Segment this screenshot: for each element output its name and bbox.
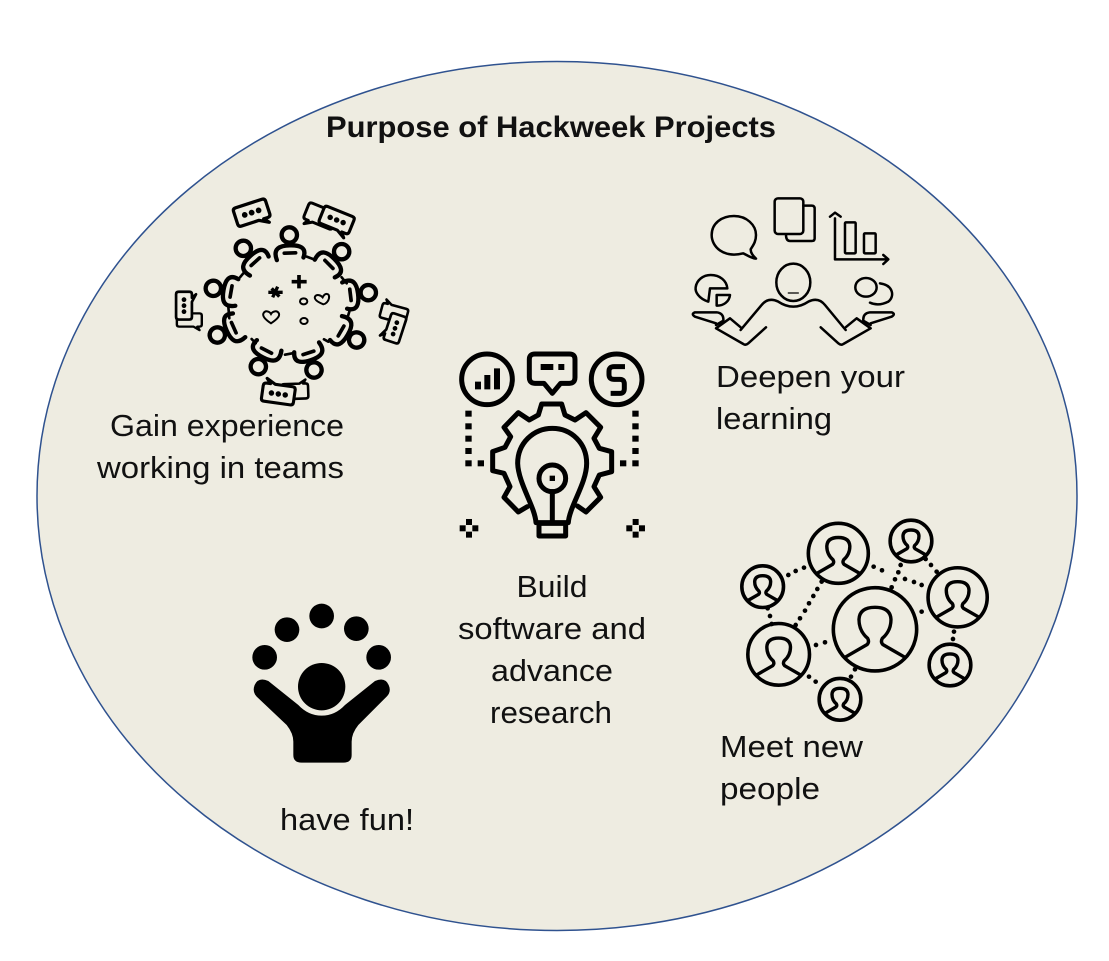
icon: person juggling balls bbox=[252, 604, 391, 763]
label: meet new people: Meet new bbox=[720, 729, 864, 764]
label: deepen learning: Deepen your bbox=[716, 359, 905, 394]
label: meet new people bbox=[720, 729, 864, 806]
icon: person juggling ideas bbox=[693, 198, 894, 345]
label: build software: Build bbox=[516, 569, 588, 604]
label: build software: research bbox=[490, 695, 612, 730]
label: deepen learning: learning bbox=[716, 401, 832, 436]
label: build software: advance bbox=[491, 653, 613, 688]
icon: network of people bbox=[742, 520, 987, 720]
icon: people around a table with speech bubbles bbox=[176, 198, 410, 405]
label: deepen learning bbox=[716, 359, 905, 436]
label: build software bbox=[458, 569, 646, 730]
label: teams: Gain experience bbox=[110, 408, 344, 443]
label: build software: software and bbox=[458, 611, 646, 646]
icon: lightbulb in gear bbox=[460, 354, 645, 538]
label: have fun: have fun! bbox=[280, 802, 414, 837]
label: teams bbox=[96, 408, 344, 485]
label: teams: working in teams bbox=[96, 450, 344, 485]
title: Purpose of Hackweek Projects bbox=[326, 111, 776, 144]
label: meet new people: people bbox=[720, 771, 820, 806]
